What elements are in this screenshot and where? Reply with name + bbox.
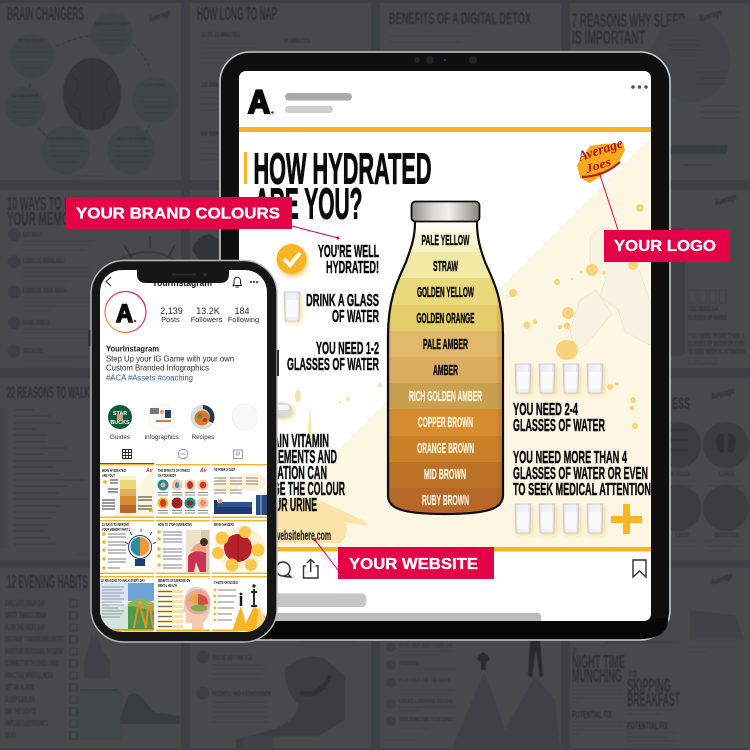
colour labels: RUBY BROWN	[422, 492, 469, 509]
callout: your brand colours	[66, 197, 340, 240]
colour labels: PALE AMBER	[423, 336, 468, 353]
callout: your brand colours: YOUR BRAND COLOURS	[76, 206, 280, 222]
thumbnail: improve your memory: 10 WAYS TO IMPROVE	[102, 522, 129, 527]
background panel: digital detox heading	[389, 9, 531, 42]
background panel: effects of stress on the body: ESS	[672, 394, 690, 413]
background panel: night time munching and skipping breakfast: #3	[628, 669, 637, 679]
thumbnail: habits for success	[212, 576, 267, 632]
background panel: brain changers: PHOTOGRAPHIC MEMORY	[49, 136, 83, 141]
callout: your website: YOUR WEBSITE	[349, 556, 478, 573]
background panel: reasons to walk	[0, 383, 90, 554]
thumbnail: reasons to walk	[100, 576, 154, 632]
bottle chart of urine colours: GOLDEN ORANGE	[416, 310, 474, 327]
colour labels: MID BROWN	[424, 466, 466, 483]
phone screen	[100, 270, 267, 632]
thumbnail: effects of stress: ON YOUR BODY	[158, 473, 176, 478]
text: vitamin supplements note: OF YOUR URINE	[248, 495, 317, 515]
post header with logo and account placeholders: A	[248, 84, 270, 120]
background panel: evening habits checklist: SET AN ALARM	[5, 683, 34, 692]
bottom yellow rule of post and top rule	[239, 127, 651, 132]
background panel: brain changers: GET YOUR GAME ON	[12, 93, 38, 98]
text: one to two glasses: GLASSES OF WATER	[287, 354, 379, 374]
background panel: how long to nap: 10 TO 20 MINUTES	[201, 30, 240, 39]
background panel: effects of stress on the body: LUNGS	[719, 472, 734, 478]
colour labels	[409, 232, 482, 509]
text: two to four glasses: YOU NEED 2-4	[513, 399, 578, 419]
colour labels: STRAW	[433, 258, 458, 275]
background panel: evening habits checklist: CONNECT WITH LOVED ONES	[5, 659, 59, 668]
highlight: guides: STAR	[113, 411, 127, 417]
tablet screen: HOW HYDRATED	[254, 144, 432, 194]
tablet screen: CHANGE THE COLOUR	[248, 479, 345, 499]
colour labels: PALE YELLOW	[422, 232, 470, 249]
highlight: guides: BUCKS	[110, 420, 130, 426]
background panel: evening habits checklist: UNPLUG ELECTRONICS	[5, 719, 48, 728]
background panel: right-hand hydration copy: Average	[713, 192, 738, 208]
background panel: how long to nap: 30 MIN	[201, 80, 219, 89]
profile bio	[106, 344, 234, 382]
background panel: night time munching and skipping breakfast: 2	[572, 647, 577, 656]
background panel: how long to nap	[197, 4, 310, 160]
icon: four glasses upper	[515, 364, 605, 395]
background panel: night time munching and skipping breakfast: POTENTIAL FIX	[627, 721, 668, 732]
background panel: habits for success with mountains: TAKE SOME TIME TO BE QUIET	[399, 717, 453, 723]
background: dimmed infographic panels: 22 REASONS TO WALK	[7, 383, 90, 402]
background panel: effects of stress on the body: LIVER	[676, 533, 689, 539]
background panel: how long to nap: 90 MINUTES	[284, 36, 310, 45]
icon: plus sign	[611, 504, 642, 534]
profile stats: Posts	[161, 315, 180, 324]
background panel: habits for success with mountains: MOVE YOUR BODY EVERY DAY	[399, 643, 453, 649]
highlight: guides	[108, 405, 132, 429]
background panel: brain changers: BE YOUR MEMORY	[18, 38, 44, 43]
text: well hydrated: YOU'RE WELL	[318, 241, 379, 261]
background panel: brain changers: LAUGH YOURSELF	[143, 82, 167, 87]
text: well hydrated	[318, 244, 379, 274]
bottle cap	[412, 202, 480, 222]
background panel: ways to improve your memory: YOUR MEMORY	[7, 209, 83, 229]
profile bio: YourInstagram	[106, 344, 159, 354]
background panel: evening habits checklist: PRACTISE MINDFULNESS	[5, 671, 53, 680]
bottom yellow rule	[239, 547, 651, 552]
thumbnail: exercise and mental health	[156, 576, 210, 632]
colour labels: COPPER BROWN	[418, 414, 473, 431]
background panel: reasons why sleep is important	[572, 7, 742, 165]
post header with logo and account placeholders	[247, 85, 648, 114]
thumbnail: effects of stress: Av	[199, 468, 208, 474]
background panel: night time munching and skipping breakfast: BREAKFAST	[627, 690, 680, 711]
highlight: recipes	[190, 405, 215, 429]
background panel: effects of stress on the body: DIGESTION	[715, 533, 739, 539]
profile stats: 13.2K	[196, 306, 220, 316]
profile username: YourInstagram	[152, 278, 212, 288]
text: two to four glasses: GLASSES OF WATER	[513, 415, 605, 435]
post title: ARE YOU?	[254, 180, 362, 228]
background panel: habits for success with mountains: CREATE A MORNING ROUTINE	[399, 699, 453, 705]
background panel: night time munching and skipping breakfast	[572, 610, 745, 745]
thumbnail: power of sleep: THE POWER OF SLEEP	[214, 467, 235, 472]
callout: your logo: YOUR LOGO	[614, 238, 716, 255]
post title	[244, 152, 431, 220]
background panel: ways to improve your memory: EAT RIGHT	[23, 232, 43, 239]
callout: your website	[314, 538, 494, 579]
background panel: reasons why sleep is important: Average	[697, 7, 723, 24]
background panel: when not to exercise: YOU'VE GOT THE FLU	[212, 653, 252, 662]
thumbnail: how hydrated	[100, 464, 154, 518]
thumbnail: power of sleep	[212, 464, 267, 518]
bottle chart of urine colours: GOLDEN YELLOW	[417, 284, 474, 301]
thumbnail: stop overeating: HOW TO STOP OVEREATING	[158, 522, 192, 527]
profile stats	[160, 308, 259, 324]
background panel: how long to nap: 60 MIN	[201, 129, 219, 138]
average joes logo: Joes	[582, 154, 613, 176]
text: drink a glass: DRINK A GLASS	[306, 290, 379, 310]
background panel: habits for success with mountains: PLAN YOUR DAY THE NIGHT	[399, 678, 450, 684]
phone top bar icons	[106, 277, 258, 287]
background panel: night time munching and skipping breakfast: POTENTIAL FIX	[572, 710, 612, 721]
phone notch	[137, 270, 229, 283]
background panel: evening habits checklist: DIM THE LIGHTS	[5, 707, 36, 716]
text: more than four glasses	[513, 450, 650, 496]
text: vitamin supplements note	[278, 434, 345, 512]
thumbnail: how hydrated: ARE YOU?	[102, 473, 115, 478]
background panel: effects of stress on the body: Average	[709, 571, 734, 587]
bottle chart of urine colours	[385, 202, 507, 516]
background panel: ways to improve your memory: 10 WAYS TO IMPROVE	[7, 194, 107, 214]
profile picture ring: A	[116, 300, 133, 328]
background panel: ways to improve your memory: SOCIALISE	[23, 348, 43, 355]
background panel: evening habits checklist: PREPARE TOMORROWS OUTFIT	[5, 635, 64, 644]
background panel: habits for success with mountains	[386, 640, 560, 748]
icon: yellow check badge	[276, 244, 308, 277]
text: drink a glass	[306, 294, 379, 322]
background panel: ways to improve your memory: AVOID STRESS	[23, 320, 50, 327]
background panel: ways to improve your memory	[7, 194, 219, 361]
background panel: brain changers: DON'T FORGET TO SLEEP	[95, 21, 128, 26]
background panel: when not to exercise	[196, 642, 355, 748]
background panel: night time munching and skipping breakfast: SKIPPING	[627, 676, 671, 697]
background panel: how long to nap: HOW LONG TO NAP	[197, 4, 277, 24]
colour labels: ORANGE BROWN	[417, 440, 474, 457]
background panel: evening habits checklist	[5, 572, 180, 740]
text: well hydrated: HYDRATED!	[326, 257, 379, 277]
colour labels: AMBER	[433, 362, 458, 379]
text: vitamin supplements note: SUPPLEMENTS AND	[248, 447, 337, 467]
thumbnail: brain changers	[212, 520, 267, 574]
profile stats: Following	[228, 315, 259, 324]
profile stats: 184	[234, 306, 250, 316]
callout: your logo	[599, 172, 730, 262]
background panel: evening habits checklist: WRITE THINGS DOWN	[5, 611, 47, 620]
beige diagonal background of post	[239, 137, 651, 549]
background panel: evening habits checklist: EVALUATE YOUR DAY	[5, 599, 45, 608]
thumbnail: habits for success: 7 HABITS FOR SUCCESS	[214, 580, 238, 585]
average joes logo: Average	[576, 136, 625, 165]
text: one to two glasses	[287, 342, 379, 370]
icon: four glasses lower	[515, 504, 605, 535]
text: drink a glass: OF WATER	[332, 306, 379, 326]
thumbnail: effects of stress	[156, 464, 210, 518]
background panel: right-hand hydration copy: YOU NEED 2-4	[688, 304, 718, 313]
background panel: habits for success with mountains: PRIORITISE	[399, 661, 419, 667]
website address: www.yourwebsitehere.com	[241, 528, 331, 543]
background panel: night time munching and skipping breakfast: MUNCHING	[572, 666, 622, 686]
tablet screen	[239, 71, 651, 625]
background panel: brain changers	[5, 4, 178, 176]
profile stats: 2,139	[160, 306, 183, 316]
caption placeholder bars	[276, 594, 541, 621]
profile picture ring	[105, 292, 146, 332]
thumbnail: exercise and mental health: MENTAL HEALTH	[158, 583, 177, 588]
phone device	[88, 260, 279, 642]
profile stats: Followers	[191, 315, 223, 324]
text: two to four glasses	[513, 402, 605, 432]
background panel: brain changers: MUSIC FOR THE MIND	[118, 136, 146, 141]
bottle chart of urine colours: RICH GOLDEN AMBER	[409, 388, 482, 405]
story highlights	[108, 404, 258, 441]
background panel: night time munching and skipping breakfast: NIGHT TIME	[572, 652, 625, 672]
post action icons	[276, 560, 646, 578]
background panel: digital detox heading: BENEFITS OF A DIGITAL DETOX	[389, 9, 531, 28]
tablet device	[220, 52, 670, 640]
background panel: brain changers: BRAIN CHANGERS	[7, 4, 84, 24]
thumbnail: improve your memory: YOUR MEMORY PART 1	[102, 527, 130, 532]
background panel: effects of stress on the body: Average	[709, 385, 735, 402]
profile tabs icons	[122, 450, 242, 458]
background panel: ways to improve your memory: EXERCISE REGULARLY	[23, 258, 65, 265]
text: one to two glasses: YOU NEED 1-2	[316, 338, 379, 358]
background panel: right-hand hydration copy	[670, 192, 746, 364]
text: vitamin supplements note: CERTAIN VITAMIN	[248, 431, 329, 451]
thumbnail: brain changers: BRAIN CHANGERS	[214, 522, 234, 527]
thumbnail: reasons to walk: 22 REASONS TO WALK EVERY DAY	[101, 578, 145, 583]
icon: pill	[278, 401, 297, 422]
background panel: reasons why sleep is important: IS IMPORTANT	[572, 28, 645, 49]
background panel: ways to improve your memory: EXERCISE YOUR BRAIN	[23, 288, 66, 295]
profile bio: #ACA #Assets #coaching	[106, 374, 193, 382]
background panel: evening habits checklist: SLEEP EARLIER	[5, 695, 35, 704]
thumbnail: effects of stress: THE EFFECTS OF STRESS	[158, 468, 190, 473]
profile bio: Custom Branded Infographics	[106, 364, 209, 372]
background panel: when not to exercise: RECENTLY HAD A CONCUSSION	[212, 689, 271, 698]
average joes logo	[577, 141, 625, 183]
thumbnail: how hydrated: HOW HYDRATED	[102, 468, 126, 473]
paint splashes and world map texture	[277, 204, 650, 543]
story highlights: Infographics	[144, 434, 179, 441]
thumbnail: improve your memory	[100, 520, 156, 574]
highlight: infographics	[149, 404, 174, 430]
background panel: evening habits checklist: 12 EVENING HABITS	[7, 572, 88, 592]
thumbnail: how hydrated: Av	[145, 468, 154, 474]
thumbnail: exercise and mental health: BENEFITS OF EXERCISE ON	[158, 578, 190, 583]
background panel: effects of stress on the body: MUSCLES	[670, 472, 690, 478]
background panel: effects of stress on the body	[655, 385, 749, 587]
icon: single glass	[284, 292, 302, 323]
thumbnail: stop overeating	[156, 520, 210, 574]
background panel: evening habits checklist: READ	[5, 731, 16, 740]
text: more than four glasses: YOU NEED MORE THAN 4	[513, 447, 627, 467]
background panel: brain changers: Average	[147, 8, 172, 24]
profile bio: Step Up your IG Game with your own	[106, 354, 234, 364]
background panel: evening habits checklist: MAINTAIN PERSONAL HYGIENE	[5, 647, 64, 656]
highlight: empty	[232, 404, 258, 430]
text: vitamin supplements note: MEDICATION CAN	[248, 463, 327, 483]
background panel: evening habits checklist: PLAN THE NEXT DAY	[5, 623, 45, 632]
story highlights: Recipes	[192, 434, 214, 441]
story highlights: Guides	[110, 434, 130, 441]
